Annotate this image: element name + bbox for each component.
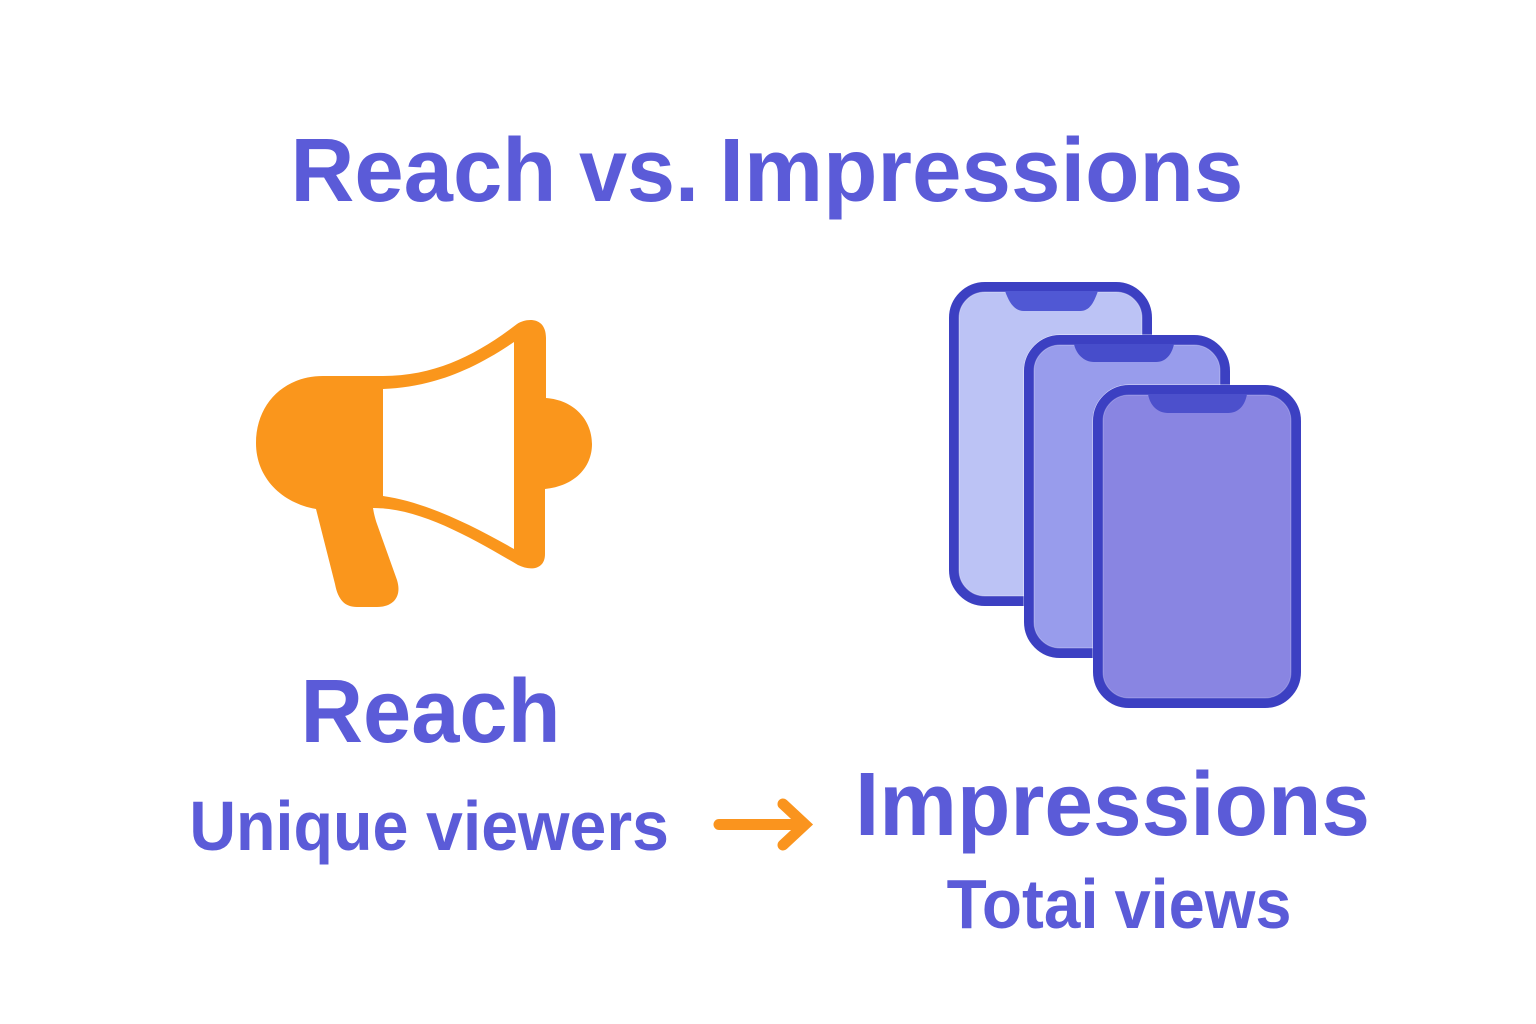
- title: [290, 121, 1243, 221]
- phone back: [954, 287, 1147, 601]
- text: Unique viewers: viewers: [426, 787, 669, 865]
- text: Total views: views: [1114, 865, 1292, 943]
- title: vs.: [579, 121, 699, 221]
- text: Total views: Totai: [947, 865, 1099, 943]
- phone front: [1098, 390, 1296, 703]
- heading: Impressions: Impressions: [855, 755, 1370, 855]
- text: Unique viewers: [189, 787, 669, 865]
- phone middle: [1029, 340, 1225, 653]
- icon: stacked phones: [954, 287, 1296, 703]
- heading: Reach: Reach: [300, 662, 560, 762]
- icon: megaphone: [256, 320, 592, 607]
- text: Unique viewers: Unique: [189, 787, 408, 865]
- arrow: [719, 804, 805, 845]
- text: Total views: [947, 865, 1292, 943]
- title: Impressions: [719, 121, 1243, 221]
- title: Reach: [290, 121, 556, 221]
